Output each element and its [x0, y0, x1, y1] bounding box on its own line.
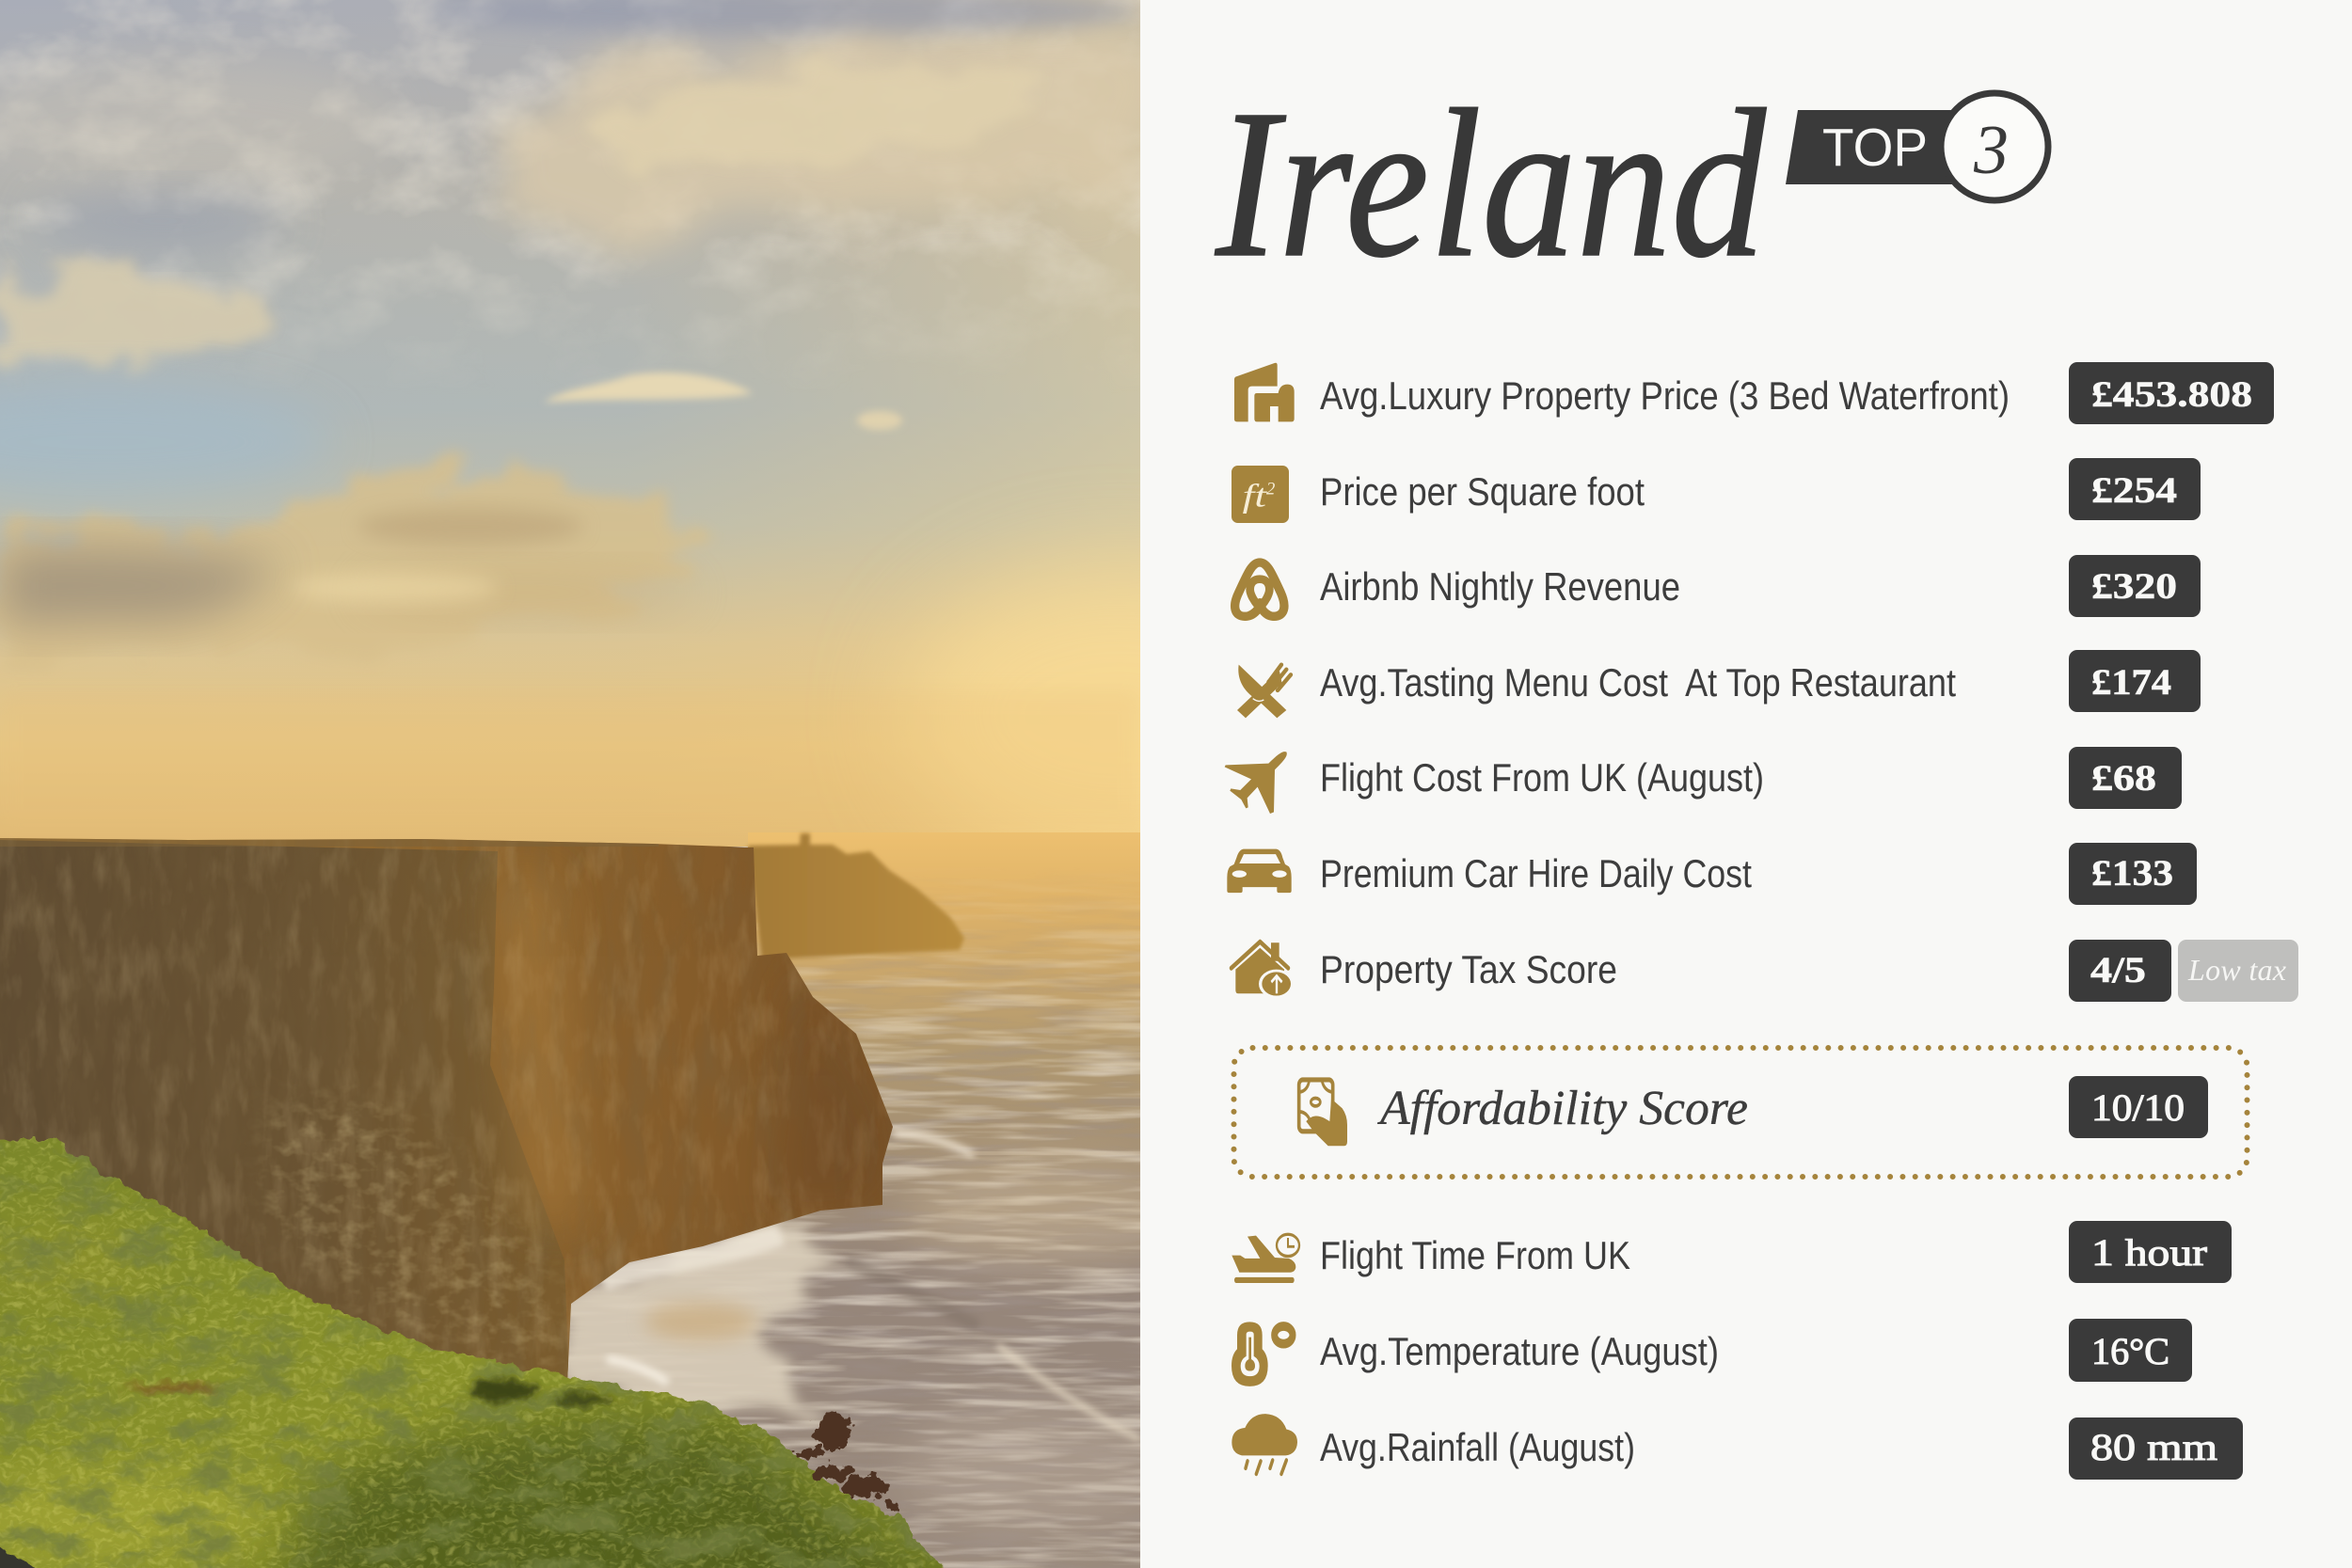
- value pill: [2069, 1319, 2192, 1382]
- icon: ft² tile: 2: [1266, 479, 1275, 499]
- icon: knife and fork: [1237, 665, 1291, 718]
- value pill: 1 hour: [2091, 1231, 2207, 1274]
- icon: ft² tile: [1232, 466, 1289, 523]
- photo: sunset over the Cliffs of Moher: [0, 0, 1140, 1568]
- row: tasting menu: [1237, 650, 2201, 718]
- row: luxury property price: [1234, 362, 2274, 424]
- panel background: [1140, 0, 2352, 1568]
- value pill: £254: [2091, 470, 2177, 511]
- value pill: 10/10: [2091, 1086, 2185, 1129]
- label: Avg.Rainfall (August): [1320, 1425, 1635, 1469]
- value pill: £320: [2091, 566, 2177, 607]
- label: Airbnb Nightly Revenue: [1320, 564, 1680, 609]
- value pill: £68: [2091, 758, 2156, 799]
- title: Ireland: Ireland: [1215, 66, 1767, 301]
- value pill: [2069, 458, 2201, 520]
- badge: top 3: TOP: [1822, 118, 1928, 178]
- row: rainfall: [1232, 1414, 2243, 1480]
- label: Affordability Score: [1377, 1082, 1748, 1135]
- label: Price per Square foot: [1320, 469, 1645, 514]
- label: Property Tax Score: [1320, 947, 1617, 991]
- icon: thermometer: [1232, 1322, 1293, 1386]
- far headland with tower: [748, 833, 964, 959]
- icon: airplane: [1225, 752, 1287, 814]
- sea: [567, 832, 1140, 1568]
- row: temperature: [1232, 1319, 2192, 1386]
- row: airbnb revenue: [1235, 555, 2201, 617]
- callout: affordability score: [1234, 1048, 2247, 1177]
- badge: top 3: [1786, 93, 2048, 200]
- value pill: £133: [2091, 853, 2173, 894]
- value pill: £453.808: [2091, 374, 2252, 415]
- value pill: [2069, 940, 2171, 1002]
- near cliff face: [0, 832, 903, 1411]
- sky: [0, 0, 1140, 847]
- icon: buildings: [1234, 363, 1295, 421]
- value pill: 16°C: [2091, 1330, 2169, 1372]
- row: property tax: [1232, 940, 2298, 1002]
- icon: car: [1227, 849, 1292, 893]
- icon: hand holding money: [1299, 1080, 1347, 1146]
- icon: plane with clock: [1232, 1234, 1299, 1283]
- label: Avg.Tasting Menu Cost At Top Restaurant: [1320, 660, 1956, 705]
- row: flight cost: [1225, 747, 2182, 814]
- gorse bush: [794, 1413, 898, 1512]
- value pill: 4/5: [2090, 950, 2146, 990]
- low tax tag: [2178, 940, 2298, 1002]
- icon: house with arrow: [1232, 942, 1294, 998]
- badge: top 3: 3: [1973, 112, 2009, 189]
- row: price per square foot: [1232, 458, 2201, 523]
- value pill: [2069, 1076, 2208, 1138]
- label: Avg.Temperature (August): [1320, 1329, 1719, 1373]
- value pill: [2069, 1418, 2243, 1480]
- row: car hire: [1227, 843, 2197, 905]
- low tax tag: Low tax: [2187, 953, 2286, 987]
- label: Premium Car Hire Daily Cost: [1320, 851, 1752, 895]
- value pill: [2069, 555, 2201, 617]
- row: flight time: [1232, 1221, 2232, 1283]
- icon: ft² tile: ft: [1243, 479, 1268, 515]
- value pill: [2069, 362, 2274, 424]
- value pill: 80 mm: [2090, 1426, 2217, 1468]
- value pill: [2069, 843, 2197, 905]
- value pill: [2069, 650, 2201, 712]
- value pill: £174: [2091, 662, 2171, 703]
- label: Flight Cost From UK (August): [1320, 755, 1764, 800]
- label: Avg.Luxury Property Price (3 Bed Waterfront): [1320, 373, 2010, 418]
- icon: rain cloud: [1232, 1414, 1297, 1474]
- icon: airbnb: [1235, 562, 1284, 616]
- label: Flight Time From UK: [1320, 1233, 1630, 1277]
- grass foreground: [0, 1129, 978, 1568]
- value pill: [2069, 1221, 2232, 1283]
- value pill: [2069, 747, 2182, 809]
